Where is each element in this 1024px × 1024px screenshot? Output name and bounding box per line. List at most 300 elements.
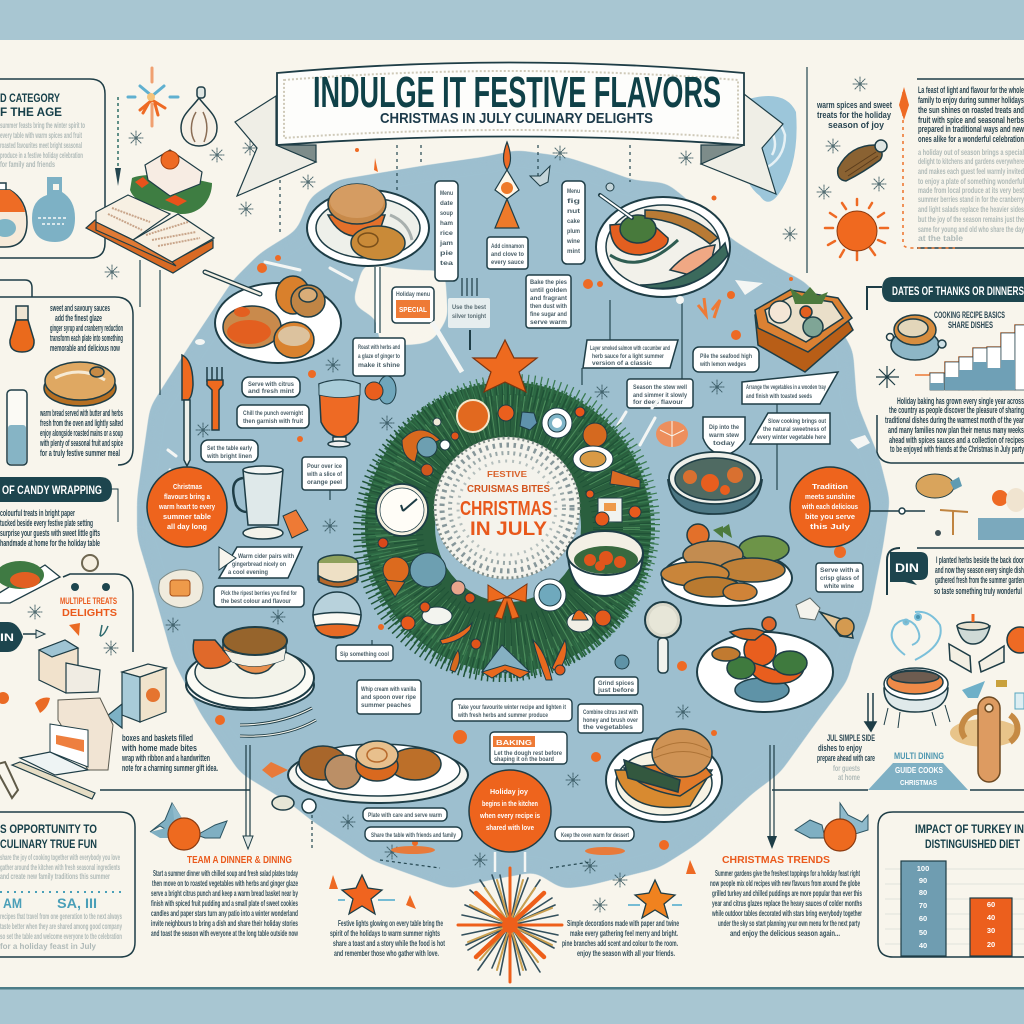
text block: top right dark: [918, 85, 1024, 144]
text in upper boxes: orange peel: [307, 479, 342, 486]
text block: top right grey: at the table: [918, 233, 963, 243]
text in upper boxes: for deep flavour: [633, 399, 683, 406]
heading: top left: F THE AGE: [0, 105, 62, 119]
icon: forks: [240, 708, 316, 736]
dashed arrow: [115, 97, 121, 186]
circle: orange bottom: shared with love: [486, 823, 534, 832]
icon: orange ball: [365, 376, 396, 404]
icon: sparkle burst: [128, 68, 178, 126]
plate: roast bread right: [661, 524, 792, 606]
panel: din section: [887, 548, 1024, 596]
decorative orange ovals: [262, 762, 625, 855]
text block: packaging: note for a charming summer gift idea.: [122, 763, 218, 773]
text block: dinner dining: then move on to roasted vegetables with herbs and ginger glaze: [152, 879, 298, 888]
icon: lace scrap: [796, 598, 820, 620]
icon: milk glass: [313, 592, 361, 638]
icon: orange parallelogram box: [219, 547, 302, 578]
icon: cookie cloud: [159, 570, 203, 608]
text in upper boxes: and finish with toasted seeds: [746, 393, 812, 400]
circle: orange right: Tradition: [812, 482, 848, 491]
icons: right upper dish and box: [916, 474, 1024, 540]
text box: wide left: [214, 586, 304, 607]
title banner: [235, 62, 797, 202]
circle: orange right: this July: [810, 522, 851, 531]
text block: christmas trends: year and citrus glazes replace the heavy sauces of colder months: [712, 899, 862, 908]
text in upper boxes: Serve with citrus: [248, 381, 294, 388]
circle: orange bottom: begins in the kitchen: [482, 799, 538, 808]
plate: burger top: [307, 184, 429, 266]
icon: cake and herbs: [130, 150, 212, 214]
icon: gift box one: [39, 640, 100, 693]
icon: gingerbread figure: [950, 697, 1020, 782]
text in upper boxes: version of a classic: [592, 360, 652, 367]
icon: ring: [82, 555, 98, 571]
connector lines: [140, 67, 807, 660]
blue swirl behind tail: [742, 96, 797, 202]
wreath: pine ring: [364, 384, 650, 671]
subheading: chart: [934, 310, 1005, 330]
icon: layered cake: [318, 555, 358, 587]
text in upper boxes: ham: [440, 220, 453, 227]
panel: left sauces: enjoy alongside roasted mains or a soup: [40, 428, 123, 438]
text in upper boxes: and fragrant: [530, 295, 568, 302]
stat labels: [3, 895, 97, 911]
text in upper boxes: until golden: [530, 287, 567, 294]
text in upper boxes: make it shine: [358, 362, 400, 369]
icon: glass ornament: [181, 87, 217, 146]
text block: christmas trends: and enjoy the delicious season again...: [730, 929, 840, 938]
text in upper boxes: date: [440, 200, 453, 207]
text block: dinner dining: [151, 869, 298, 938]
text block: dinner dining: finish with spiced fruit pudding and a small plate of sweet cookies: [151, 899, 298, 908]
icon: blue and gold pieces: [962, 680, 1024, 709]
panel: bottom left: [0, 812, 135, 957]
text block: right lower: at home: [838, 772, 860, 782]
text in upper boxes: jam: [439, 240, 453, 247]
text in upper boxes: Add cinnamon: [491, 243, 524, 250]
bar: blue: 50: [919, 928, 927, 937]
bowl: stew: [668, 452, 762, 514]
dish: square wooden box: [755, 287, 853, 372]
text boxes: lower left: [336, 563, 863, 841]
bar: orange: 60: [987, 900, 995, 909]
text block: christmas trends: [710, 869, 862, 938]
circle: orange left: flavours bring a: [164, 492, 211, 501]
text block: left sauces upper: sweet and savoury sauces: [50, 303, 110, 313]
icon: sauce bottle: [10, 306, 34, 352]
text box: wide left: the best colour and flavour: [221, 598, 291, 605]
text in upper boxes: with a slice of: [306, 471, 343, 478]
icon: fork: [207, 367, 223, 430]
text in upper boxes: Menu: [440, 190, 453, 197]
text block: chart: [885, 396, 1024, 454]
text in upper boxes: [206, 188, 827, 486]
text block: christmas trends: while outdoor tables decorated with stars bring everybody together: [711, 909, 862, 918]
text in upper boxes: Slow cooking brings out: [768, 418, 827, 425]
text block: right lower: JUL SIMPLE SIDE: [827, 733, 875, 743]
arrow: right circle connector: [870, 508, 925, 514]
text: lower boxes: Let the dough rest before: [494, 750, 562, 757]
text: lower boxes: white wine: [823, 583, 854, 590]
circle: orange bottom: when every recipe is: [479, 811, 540, 820]
text: lower boxes: and spoon over ripe: [361, 694, 416, 701]
wreath heading july: IN JULY: [470, 519, 547, 540]
text block: left sauces lower: for a truly festive summer meal: [40, 448, 120, 458]
panel: left sauces: ginger syrup and cranberry reduction: [50, 323, 123, 333]
icon: salad bowl: [567, 531, 643, 596]
text in upper boxes: tea: [440, 260, 454, 267]
heading: chart: [915, 822, 1024, 851]
text block: star right: [562, 919, 679, 958]
icon: orange leaf fan: [656, 298, 720, 447]
icon: soup pot: [886, 315, 946, 360]
text block: top right centre: warm spices and sweet: [816, 100, 892, 110]
bar: blue: 70: [919, 901, 927, 910]
circle: orange right: meets sunshine: [805, 492, 855, 501]
text in upper boxes: Pile the seafood high: [700, 353, 752, 360]
text block: top right grey: [918, 147, 1024, 243]
text block: bottom left upper: and create new family traditions this summer: [0, 871, 110, 881]
text: lower boxes: Plate with care and serve warm: [368, 812, 442, 819]
central blue blob: [137, 150, 890, 889]
text block: din: [934, 555, 1024, 596]
circle: orange right: [790, 467, 870, 547]
panel: candy wrapping pill: OF CANDY WRAPPING: [2, 483, 102, 497]
text: lower boxes: Whip cream with vanilla: [361, 686, 416, 693]
text block: christmas trends: now people mix old recipes with new flavours from around the globe: [710, 879, 860, 888]
bar: orange: 30: [987, 926, 995, 935]
heading: bottom left: S OPPORTUNITY TO: [0, 822, 97, 836]
callout: teal trapezoid: MULTI DINING: [894, 751, 944, 761]
text block: candy wrapping: handmade at home for the holiday table: [0, 538, 100, 548]
icon: stems under orange circle: [495, 852, 525, 872]
text block: dinner dining: invite neighbours to bring a dish and share their holiday stories: [151, 919, 298, 928]
icon: glass mug: [233, 466, 283, 539]
icon: gift box two: [107, 664, 166, 728]
text block: left sauces upper: memorable and delicious now: [50, 343, 121, 353]
bar: blue: 90: [919, 876, 927, 885]
text: lower boxes: Take your favourite winter recipe and lighten it: [458, 704, 567, 711]
text: lower boxes: crisp glass of: [820, 575, 860, 582]
text block: packaging: boxes and baskets filled: [122, 733, 193, 743]
text: lower boxes: BAKING: [496, 738, 532, 747]
icon: blue jar: [32, 177, 75, 242]
text block: right lower: dishes to enjoy: [818, 743, 862, 753]
icon: tree star: [473, 340, 537, 392]
bar chart: right panel: [915, 325, 1024, 390]
circle: orange left: warm heart to every: [158, 502, 216, 511]
text in upper boxes: Set the table early: [207, 445, 252, 452]
bar: blue: 100: [917, 864, 929, 873]
icon: translucent fork box: [448, 278, 490, 350]
text block: top left: every table with warm spices and fruit: [0, 130, 82, 140]
plate: top right salmon: [596, 195, 730, 297]
text block: top left: for family and friends: [0, 159, 55, 169]
text: lower boxes: honey and brush over: [583, 717, 638, 724]
heading: dinner dining: TEAM A DINNER & DINING: [187, 854, 292, 866]
text block: top left: produce in a festive holiday celebration: [0, 150, 83, 160]
icon: clock: [376, 484, 428, 536]
heading: bottom left: [0, 822, 97, 851]
text block: left sauces lower: [39, 408, 123, 458]
text: lower boxes: the vegetables: [583, 724, 633, 731]
text block: candy wrapping: tucked beside every festive plate setting: [0, 518, 93, 528]
heading: top left: D CATEGORY: [0, 91, 60, 105]
icon: spark star: [876, 366, 899, 388]
text in upper boxes: SPECIAL: [399, 305, 427, 314]
icon: star left: [329, 875, 416, 914]
text block: left sauces upper: add the finest glaze: [55, 313, 102, 323]
callout: teal trapezoid: [868, 751, 968, 790]
text in upper boxes: soup: [440, 210, 453, 217]
dashed connectors top: [280, 145, 630, 232]
text: lower boxes: with fresh herbs and summer produce: [457, 712, 548, 719]
icon: triangle flag: [219, 547, 236, 570]
text block: packaging: [121, 733, 218, 773]
text in upper boxes: then dust with: [530, 303, 567, 310]
text in upper boxes: a glaze of ginger to: [358, 353, 400, 360]
text block: right lower: for guests: [833, 763, 860, 773]
icon: orange flags: [0, 623, 108, 713]
icon: holly with orange left: [150, 803, 227, 850]
text in upper boxes: mint: [567, 248, 581, 255]
text block: top right centre: treats for the holiday: [817, 110, 891, 120]
icon: sun: [825, 199, 888, 260]
text block: bottom left lower: recipes that travel from one generation to the next always: [0, 911, 122, 921]
icon: salad dish: [0, 561, 60, 603]
text in upper boxes: with bright linen: [206, 453, 252, 460]
circle: orange left: Christmas: [173, 482, 202, 491]
panel: left sauces: transform each plate into something: [50, 333, 123, 343]
text block: left sauces lower: with plenty of seasonal fruit and spice: [39, 438, 123, 448]
panel: left sauces: warm bread served with butter and herbs: [40, 408, 123, 418]
callout: teal trapezoid: GUIDE COOKS: [895, 766, 944, 775]
icon: orange jar: [0, 183, 27, 247]
panel: bottom right bar chart: [878, 812, 1024, 957]
callout: teal trapezoid: CHRISTMAS: [900, 780, 937, 787]
icon: thermometer: [865, 693, 876, 731]
bar: orange: 20: [987, 940, 995, 949]
bar: blue: 80: [919, 888, 927, 897]
text block: right lower: [817, 733, 875, 782]
text: parallelogram box: a cool evening: [228, 569, 268, 576]
white splashes on blob: [168, 262, 870, 500]
icon: translucent fork box: silver tonight: [452, 313, 487, 320]
text in upper boxes: warm stew: [708, 432, 740, 439]
text block: christmas trends: Summer gardens give the freshest toppings for a holiday feast right: [715, 869, 860, 878]
text: parallelogram box: [228, 553, 294, 576]
orange dashed marker: [899, 87, 955, 248]
text block: bottom left lower: [0, 911, 122, 951]
text: lower boxes: Grind spices: [598, 680, 634, 687]
text block: dinner dining: Start a summer dinner with chilled soup and fresh salad plates today: [153, 869, 298, 878]
text in upper boxes: Bake the pies: [530, 279, 567, 286]
text block: top left: summer feasts bring the winter spirit to: [0, 120, 85, 130]
text in upper boxes: Pour over ice: [307, 463, 342, 470]
text block: top right centre: season of joy: [828, 120, 884, 130]
circle: orange bottom: Holiday joy: [490, 787, 529, 796]
heading: bottom left: CULINARY TRUE FUN: [0, 837, 97, 851]
text in upper boxes: the natural sweetness of: [763, 426, 827, 433]
text block: star left: Festive lights glowing on every table bring the: [338, 919, 443, 928]
circle: orange left: [147, 467, 227, 547]
text block: star left: [330, 919, 445, 958]
text block: bottom left upper: [0, 852, 120, 881]
text block: dinner dining: candles and paper stars turn any patio into a winter wonderland: [151, 909, 298, 918]
text in upper boxes: and fresh mint: [248, 388, 295, 395]
plate: vegetables right: [697, 617, 833, 712]
text: lower boxes: shaping it on the board: [494, 756, 554, 763]
text block: star right: Simple decorations made with paper and twine: [567, 919, 679, 928]
text block: candy wrapping: colourful treats in bright paper: [0, 508, 75, 518]
text in upper boxes: Roast with herbs and: [358, 344, 400, 351]
heading: multiple delights: [60, 596, 117, 619]
text in upper boxes: fine sugar and: [530, 311, 567, 318]
icon: translucent fork box: Use the best: [452, 304, 487, 311]
text block: star left: share a toast and a story while the food is hot: [333, 939, 445, 948]
text: lower boxes: [340, 567, 860, 839]
text block: bottom left lower: taste better when they are shared among good company: [0, 921, 122, 931]
text: lower boxes: Sip something cool: [340, 651, 389, 658]
icon: juice glass: [319, 380, 360, 447]
doily: [434, 437, 580, 579]
icon: star right: [628, 860, 696, 918]
icon: red bow: [488, 584, 527, 619]
circle: orange left: all day long: [167, 522, 207, 531]
paper bay in blob: [352, 262, 448, 345]
icon: holly with orange right: [795, 803, 868, 851]
text block: christmas trends: grilled turkey and chilled puddings are more popular than ever this: [712, 889, 862, 898]
circle: orange bottom: [469, 770, 551, 852]
bar: orange: [970, 898, 1012, 956]
icon: knife: [182, 355, 193, 466]
plate: pastries left: [205, 272, 341, 363]
icon: hanging kite ornament: [495, 142, 519, 228]
text in upper boxes: and simmer it slowly: [633, 392, 687, 399]
icon: cone: [820, 612, 854, 638]
ribbon tails: [235, 94, 783, 196]
text in upper boxes: today: [713, 440, 735, 447]
text block: top right centre: [816, 100, 892, 130]
wreath heading large: CHRISTMAS: [460, 498, 552, 520]
heading: top left: [0, 91, 62, 119]
text block: candy wrapping: surprise your guests with sweet little gifts: [0, 528, 100, 538]
text block: dinner dining: serve a bright citrus punch and keep a warm bread basket near by: [151, 889, 298, 898]
circle: orange right: bite you serve: [805, 512, 855, 521]
text block: star right: make every gathering feel merry and bright.: [570, 929, 678, 938]
wreath heading small: FESTIVE: [487, 469, 527, 479]
text in upper boxes: Chill the punch overnight: [243, 410, 304, 417]
icon: pearl: [615, 655, 629, 669]
panel: dates pill: [867, 277, 1024, 310]
text: lower boxes: Keep the oven warm for dessert: [561, 832, 630, 839]
text in upper boxes: nut: [567, 208, 581, 215]
panel: multiple delights: [60, 555, 133, 652]
text block: right lower: prepare ahead with care: [817, 753, 875, 763]
icon: starburst: [458, 868, 562, 982]
text block: candy wrapping: [0, 508, 100, 548]
panel: top left: [0, 79, 105, 258]
text: lower boxes: Serve with a: [820, 567, 859, 574]
heading: multiple delights: MULTIPLE TREATS: [60, 596, 117, 607]
wreath ornaments: [378, 400, 641, 680]
bar: blue: 60: [919, 914, 927, 923]
text in upper boxes: wine: [566, 238, 580, 245]
icon: bread loaf: [44, 362, 116, 406]
text: lower boxes: Combine citrus zest with: [583, 709, 638, 716]
text block: star right: pine branches add scent and colour to the room.: [562, 939, 678, 948]
text: lower boxes: summer peaches: [361, 702, 411, 709]
panel: left sauces: [0, 280, 133, 465]
arrow: down right: [767, 745, 777, 849]
icon: bowl cards and orange: [949, 614, 1024, 672]
dark tag: DIN: [895, 561, 919, 575]
stat labels: SA, III: [57, 895, 97, 911]
text in upper boxes: cake: [567, 218, 580, 225]
dark pill arrow: IN: [0, 632, 14, 644]
text block: left sauces upper: [50, 303, 123, 353]
subheading: chart: SHARE DISHES: [948, 320, 993, 330]
plate: burger right: [606, 729, 722, 822]
stat labels: AM: [3, 895, 22, 911]
panel: candy wrapping pill: [0, 477, 118, 522]
text in upper boxes: pie: [440, 250, 454, 257]
text block: bottom left upper: share the joy of cooking together with everybody you love: [0, 852, 120, 862]
icon: open recipe book: [86, 195, 214, 273]
icon: knife and paper: [0, 752, 95, 799]
text in upper boxes: fig: [567, 198, 580, 205]
heading: multiple delights: DELIGHTS: [62, 607, 117, 619]
text block: bottom left lower: for a holiday feast in July: [0, 941, 96, 951]
icon: magnifier: [645, 602, 681, 673]
icon: test tube: [7, 390, 27, 465]
text in upper boxes: plum: [567, 228, 580, 235]
text block: bottom left upper: gather around the kitchen with fresh seasonal ingredients: [0, 862, 120, 872]
circle: orange left: summer table: [163, 512, 211, 521]
title: INDULGE IT FESTIVE FLAVORS: [313, 68, 721, 117]
text in upper boxes: Dip into the: [709, 424, 739, 431]
text in upper boxes: Season the stew well: [633, 384, 687, 391]
text in upper boxes: Arrange the vegetables in a wooden tray: [746, 384, 826, 391]
icon: parcel: [50, 698, 113, 770]
text block: top left: roasted favourites meet bright seasonal: [0, 140, 82, 150]
text in upper boxes: Holiday menu: [396, 291, 430, 298]
arrow: down left: [243, 745, 253, 849]
text block: packaging: wrap with ribbon and a handwritten: [121, 753, 210, 763]
circle: orange right: with each delicious: [801, 502, 858, 511]
text: parallelogram box: Warm cider pairs with: [238, 553, 294, 560]
banner body: [277, 62, 744, 145]
text in upper boxes: herb sauce for a light summer: [592, 353, 664, 360]
text block: packaging: with home made bites: [121, 743, 197, 753]
text block: top left: [0, 120, 85, 169]
text in upper boxes: every winter vegetable here: [757, 434, 826, 441]
text in upper boxes: serve warm: [530, 319, 567, 326]
dashed connectors: [312, 815, 590, 868]
icon: steam: [892, 612, 941, 660]
text in upper boxes: every sauce: [491, 259, 524, 266]
plate: bread bottom: [288, 741, 468, 803]
text block: bottom left lower: so set the table and welcome everyone to the celebration: [0, 931, 122, 941]
icon: small bell: [530, 166, 614, 191]
text block: dinner dining: and toast the season with everyone at the long table outside now: [151, 929, 298, 938]
icon: baked pot: [884, 668, 950, 728]
wreath heading medium: CRUISMAS BITES: [467, 484, 550, 495]
text block: star left: spirit of the holidays to warm summer nights: [330, 929, 440, 938]
text in upper boxes: Menu: [567, 188, 580, 195]
text block: star left: and remember those who gather with love.: [334, 949, 439, 958]
subtitle: CHRISTMAS IN JULY CULINARY DELIGHTS: [380, 110, 653, 127]
